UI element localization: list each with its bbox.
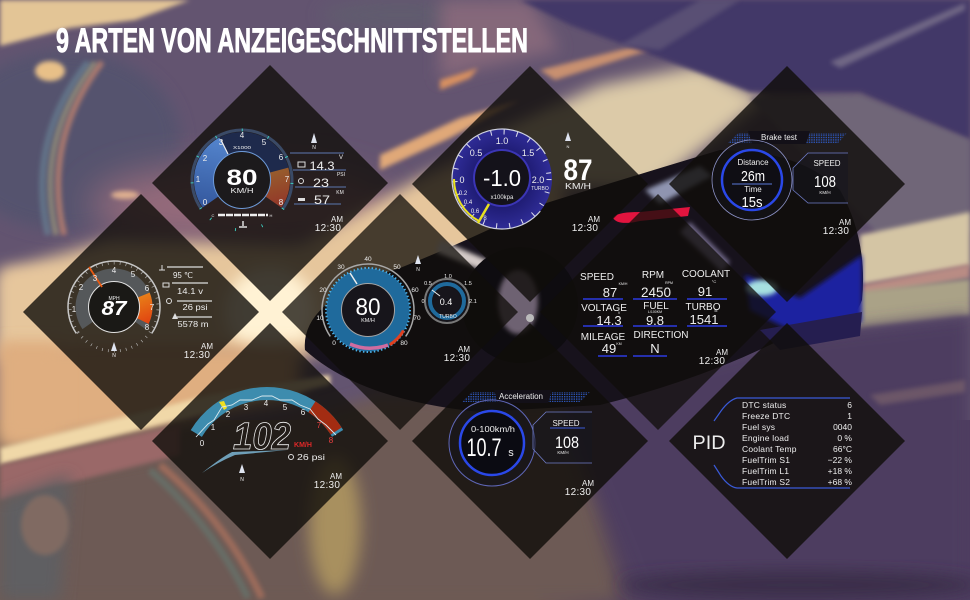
PID table: 66°C xyxy=(833,444,852,454)
data grid: SPEED xyxy=(580,272,614,283)
brake dial: 15s xyxy=(742,194,762,211)
clock xyxy=(823,218,851,237)
brake dial: Time xyxy=(744,185,762,194)
turbo dial: 0.5 xyxy=(470,148,482,158)
turbo dial xyxy=(421,274,477,323)
speed readout: 87 xyxy=(564,154,592,187)
turbo dial: 0.4 xyxy=(464,200,473,206)
turbo dial: TURBO xyxy=(439,314,457,320)
speed dial: KM/H xyxy=(361,318,375,324)
readouts xyxy=(290,153,346,207)
tach arc: 3 xyxy=(244,403,249,412)
speed dial: 10 xyxy=(316,315,324,322)
clock xyxy=(565,479,594,498)
tach arc: 5 xyxy=(283,403,288,412)
data grid xyxy=(580,269,730,356)
MPH dial xyxy=(50,243,178,371)
MPH dial: 4 xyxy=(112,266,117,275)
tach arc xyxy=(153,362,381,590)
speed dial: 70 xyxy=(413,315,421,322)
turbo dial: 1.0 xyxy=(496,136,508,146)
tach arc: 1 xyxy=(211,423,216,432)
PID table: Coolant Temp xyxy=(742,444,797,454)
title: 9 ARTEN VON ANZEIGESCHNITTSTELLEN xyxy=(56,22,528,60)
compass xyxy=(415,255,421,273)
gauge dial: 5 xyxy=(262,138,267,147)
readouts: 23 xyxy=(313,176,329,190)
compass: N xyxy=(240,477,244,483)
panel: arc tachometer xyxy=(152,323,388,590)
readouts xyxy=(159,265,212,329)
compass xyxy=(565,132,571,149)
turbo dial: x100kpa xyxy=(491,195,514,201)
speed panel: 108 xyxy=(814,174,836,191)
panel: turbo gauge xyxy=(412,66,648,302)
panel: speed and turbo dual gauges xyxy=(282,194,518,430)
clock: 12:30 xyxy=(444,353,470,364)
gauge dial: 1 xyxy=(196,175,201,184)
data grid: M xyxy=(715,309,718,313)
clock: AM xyxy=(582,479,594,488)
tach arc: 8 xyxy=(329,436,334,445)
gauge dial xyxy=(172,110,312,250)
readouts: 5578 m xyxy=(178,320,209,329)
compass: N xyxy=(312,145,316,151)
gauge dial: 7 xyxy=(285,175,290,184)
speed dial: 50 xyxy=(393,264,401,271)
header band xyxy=(728,131,847,144)
MPH dial: 2 xyxy=(79,283,84,292)
turbo dial: TURBO xyxy=(531,186,549,192)
speed panel: SPEED xyxy=(552,419,580,428)
MPH dial: 8 xyxy=(145,323,150,332)
MPH dial: 3 xyxy=(93,274,98,283)
speed readout: KM/H xyxy=(565,182,591,191)
turbo dial: 1.0 xyxy=(444,274,452,280)
gauge dial: X1000 xyxy=(233,145,252,150)
MPH dial: 1 xyxy=(72,305,77,314)
turbo dial: 0 xyxy=(459,175,465,185)
turbo dial: 1.5 xyxy=(522,148,534,158)
compass: N xyxy=(112,353,116,359)
gauge dial: 6 xyxy=(279,153,284,162)
MPH dial: 6 xyxy=(145,284,150,293)
data grid: VOLTAGE xyxy=(581,303,627,314)
data grid: KM/H xyxy=(619,282,628,286)
readouts: 95 ℃ xyxy=(173,271,193,280)
PID table xyxy=(742,400,852,487)
readouts: 57 xyxy=(314,193,330,207)
PID table: FuelTrim S2 xyxy=(742,477,790,487)
data grid: N xyxy=(650,341,660,356)
data grid: TURBO xyxy=(686,302,721,313)
PID table: +18 % xyxy=(828,466,852,476)
psi readout xyxy=(288,453,325,462)
speed dial: 80 xyxy=(356,294,380,321)
header band xyxy=(462,390,590,403)
speed dial: 20 xyxy=(319,287,327,294)
clock: 12:30 xyxy=(565,487,591,498)
clock: 12:30 xyxy=(823,226,849,237)
turbo dial: 8 xyxy=(483,216,487,222)
acceleration dial xyxy=(449,400,535,486)
MPH dial: 87 xyxy=(102,298,127,320)
MPH dial: MPH xyxy=(108,296,120,302)
clock: AM xyxy=(330,472,342,481)
compass: N xyxy=(567,144,570,149)
data grid: 1541 xyxy=(690,312,718,327)
clock xyxy=(184,342,213,361)
data grid: °C xyxy=(712,279,716,284)
tach arc: 0 xyxy=(200,439,205,448)
speed dial: 30 xyxy=(337,264,345,271)
turbo dial: 0.5 xyxy=(424,281,432,287)
readouts: KM xyxy=(336,190,344,196)
panel: numeric data grid xyxy=(540,194,776,430)
tach arc: 2 xyxy=(226,410,231,419)
psi readout: 26 psi xyxy=(297,453,325,462)
panel: PID list xyxy=(669,323,905,559)
gauge dial: KM/H xyxy=(230,188,254,195)
readouts: PSI xyxy=(337,172,345,178)
data grid: L/100KM xyxy=(648,310,662,314)
fuel bar xyxy=(212,213,273,227)
acceleration dial: 0-100km/h xyxy=(471,424,515,434)
data grid: 87 xyxy=(603,285,617,300)
clock xyxy=(314,472,342,491)
header band: Brake test xyxy=(761,133,798,142)
speed dial: 60 xyxy=(411,287,419,294)
PID table: −22 % xyxy=(828,455,852,465)
data grid: V xyxy=(618,311,621,315)
readouts: 26 psi xyxy=(182,303,208,312)
speed panel: KM/H xyxy=(557,450,569,455)
panel: brake test xyxy=(669,66,905,302)
PID table: 6 xyxy=(847,400,852,410)
data grid: DIRECTION xyxy=(634,330,688,341)
gauge dial: 4 xyxy=(240,131,245,140)
clock: AM xyxy=(458,345,470,354)
PID table: DTC status xyxy=(742,400,787,410)
speed dial: 80 xyxy=(400,340,408,347)
PID table: Engine load xyxy=(742,433,789,443)
speed 102: 102 xyxy=(233,416,291,458)
data grid: RPM xyxy=(665,281,673,285)
data grid: RPM xyxy=(642,270,664,281)
acceleration dial: s xyxy=(508,447,514,459)
clock: AM xyxy=(331,215,343,224)
data grid: 49 xyxy=(602,341,616,356)
turbo dial: 0 xyxy=(421,299,425,305)
PID table: Fuel sys xyxy=(742,422,775,432)
speed panel: SPEED xyxy=(813,159,841,168)
turbo dial: 2.0 xyxy=(532,175,544,185)
clock: AM xyxy=(839,218,851,227)
speed panel xyxy=(793,153,848,203)
speed panel: KM/H xyxy=(819,190,831,195)
PID table: FuelTrim L1 xyxy=(742,466,789,476)
clock: 12:30 xyxy=(314,480,340,491)
turbo dial: 1.5 xyxy=(464,281,472,287)
tach arc: 4 xyxy=(264,399,269,408)
race car silhouette xyxy=(305,150,863,412)
speed dial: 40 xyxy=(364,256,372,263)
MPH dial: 5 xyxy=(131,270,136,279)
data grid: FUEL xyxy=(643,301,669,312)
panel: RPM gauge with voltage, PSI and KM readouts xyxy=(152,65,388,301)
clock xyxy=(315,215,343,234)
data grid: KM xyxy=(616,342,622,346)
data grid: 14.3 xyxy=(596,313,622,328)
data grid: MILEAGE xyxy=(581,332,626,343)
PID table: 0040 xyxy=(833,422,852,432)
readouts: 14.1 v xyxy=(177,287,203,296)
speed dial: 0 xyxy=(332,340,336,347)
brake dial: 26m xyxy=(741,168,765,185)
data grid: 2450 xyxy=(641,285,671,300)
PID table: 1 xyxy=(847,411,852,421)
compass: N xyxy=(416,267,420,273)
readouts: V xyxy=(339,155,343,161)
data grid: 91 xyxy=(698,284,712,299)
turbo dial: 0.2 xyxy=(459,191,468,197)
clock xyxy=(572,215,600,234)
brake dial: Distance xyxy=(737,158,769,167)
fuel bar: C xyxy=(212,213,215,218)
tach arc: 6 xyxy=(301,408,306,417)
header band: Acceleration xyxy=(499,392,543,401)
clock: AM xyxy=(588,215,600,224)
data grid: COOLANT xyxy=(682,269,730,280)
speed 102 xyxy=(202,416,312,473)
compass xyxy=(311,133,317,151)
clock xyxy=(444,345,470,364)
clock: 12:30 xyxy=(699,356,725,367)
compass xyxy=(111,342,117,359)
PID label: PID xyxy=(692,433,726,454)
speed 102: KM/H xyxy=(294,442,312,449)
readouts: 14.3 xyxy=(310,159,335,173)
speed dial xyxy=(304,246,432,374)
gauge dial: 0 xyxy=(203,198,208,207)
turbo dial: 2.1 xyxy=(469,299,477,305)
fuel bar: H xyxy=(270,213,273,218)
PID table: Freeze DTC xyxy=(742,411,790,421)
speed panel: 108 xyxy=(555,433,579,452)
PID table: 0 % xyxy=(837,433,852,443)
tach arc: 7 xyxy=(317,421,322,430)
turbo dial: 0.4 xyxy=(440,297,452,307)
PID table: FuelTrim S1 xyxy=(742,455,790,465)
panel: acceleration xyxy=(412,323,648,559)
turbo dial: 0.6 xyxy=(471,209,480,215)
turbo dial: -1.0 xyxy=(483,165,521,191)
acceleration dial: 10.7 xyxy=(466,434,502,462)
PID table: +68 % xyxy=(828,477,852,487)
panel: MPH gauge xyxy=(23,194,259,430)
gauge dial: 80 xyxy=(226,165,258,190)
gauge dial: 3 xyxy=(219,138,224,147)
bracket xyxy=(714,398,850,488)
clock: 12:30 xyxy=(315,223,341,234)
clock xyxy=(699,348,728,367)
speed panel xyxy=(533,412,592,463)
clock: 12:30 xyxy=(572,223,598,234)
compass xyxy=(239,464,245,483)
MPH dial: 7 xyxy=(150,303,155,312)
clock: 12:30 xyxy=(184,350,210,361)
data grid: 9.8 xyxy=(646,313,664,328)
gauge dial: 8 xyxy=(279,198,284,207)
turbo dial xyxy=(432,109,572,249)
clock: AM xyxy=(201,342,213,351)
clock: AM xyxy=(716,348,728,357)
gauge dial: 2 xyxy=(203,154,208,163)
brake dial xyxy=(712,140,792,220)
